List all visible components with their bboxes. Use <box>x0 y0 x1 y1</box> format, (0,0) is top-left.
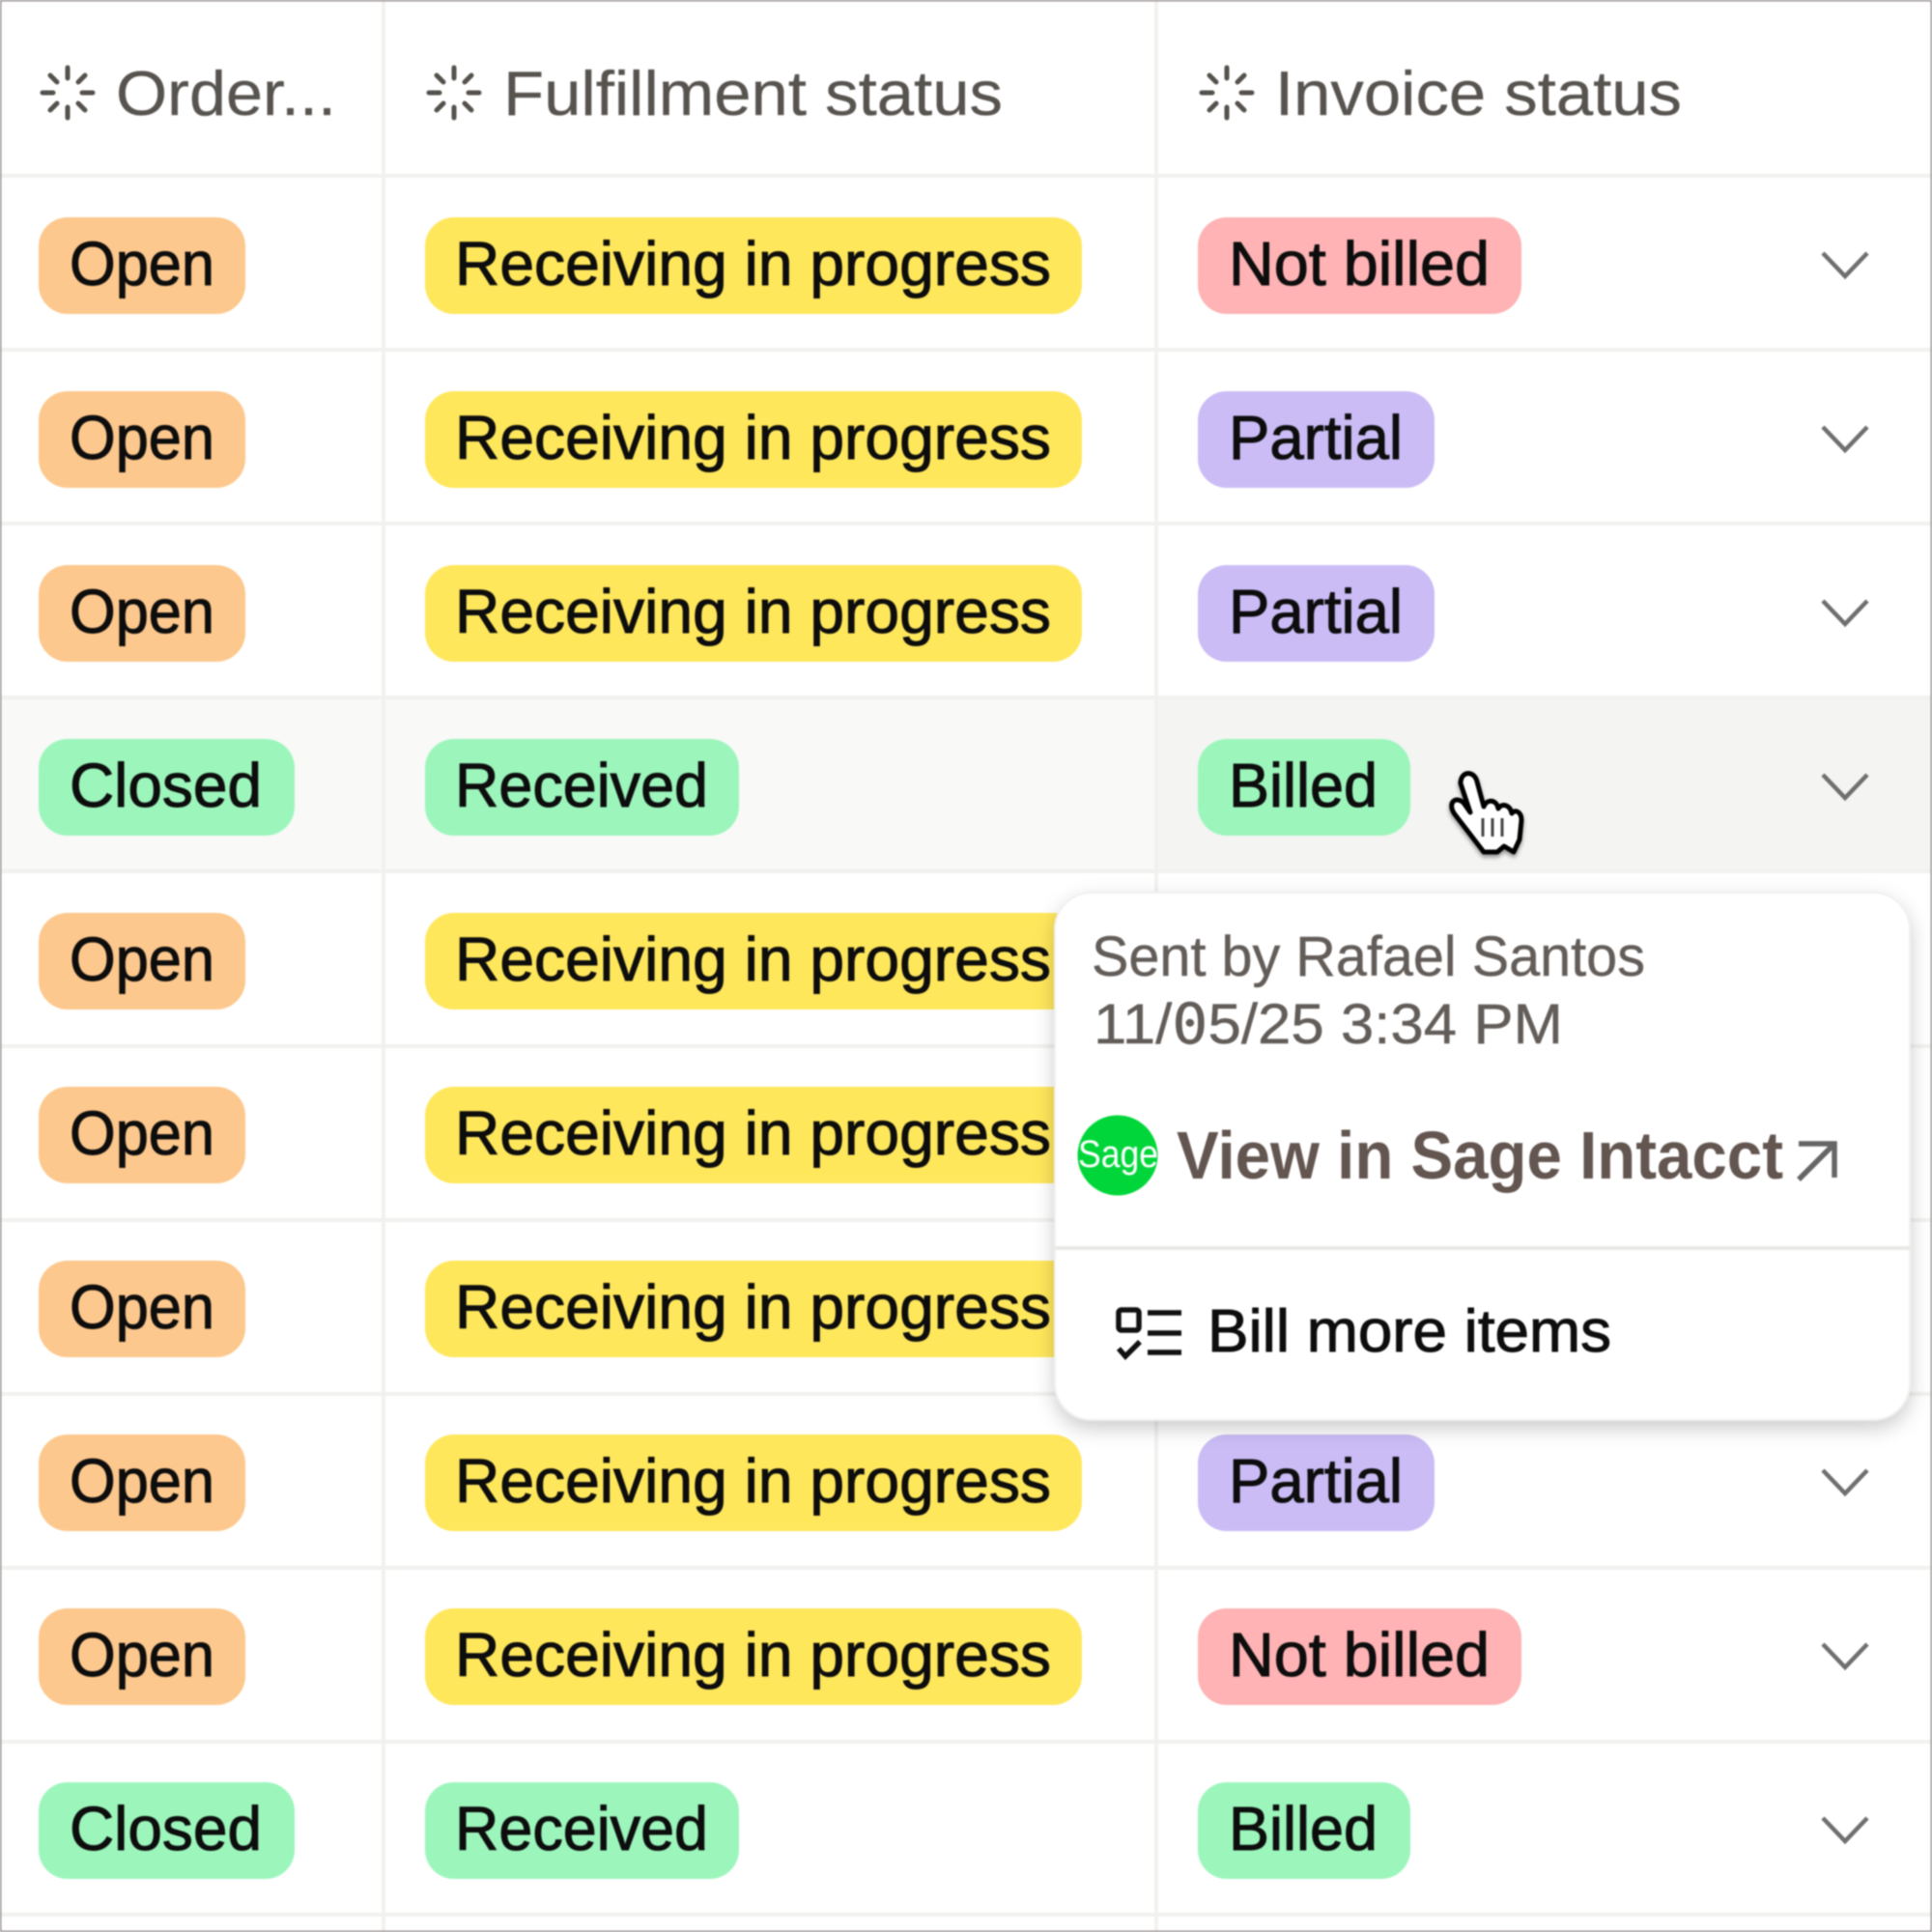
row 9: Not billed <box>1229 1620 1490 1690</box>
row 3 <box>39 565 1867 662</box>
column header: Invoice status: Invoice status <box>1275 58 1682 128</box>
row 2: Open <box>70 403 214 472</box>
sent date and time: 11/05/25 3:34 PM <box>1094 991 1563 1057</box>
icon: status spark <box>1202 68 1252 118</box>
row 5: Open <box>70 924 214 994</box>
row 8: Open <box>70 1446 214 1516</box>
row 2: Partial <box>1229 403 1403 472</box>
row 3: Receiving in progress <box>455 577 1051 646</box>
sent by line: Sent by Rafael Santos <box>1092 925 1645 988</box>
action: Bill more items: Bill more items <box>1208 1298 1611 1365</box>
row 4: highlighted: Closed <box>70 751 262 820</box>
icon: status spark <box>429 68 479 118</box>
link: View in Sage Intacct: View in Sage Intacct <box>1177 1118 1783 1193</box>
row 7: Receiving in progress <box>455 1272 1051 1342</box>
row 3: Partial <box>1229 577 1403 646</box>
row 10: Closed <box>70 1794 262 1863</box>
row 3: Open <box>70 577 214 646</box>
row 10 <box>39 1782 1867 1879</box>
icon: external link arrow <box>1799 1144 1834 1179</box>
row 6 <box>39 1087 1082 1183</box>
row 2 <box>39 391 1867 488</box>
row 1: Receiving in progress <box>455 229 1051 298</box>
row 1: Open <box>70 229 214 298</box>
row 4: highlighted: Billed <box>1229 751 1378 820</box>
icon: status spark <box>43 68 93 118</box>
row 10: Received <box>455 1794 708 1863</box>
row 2: Receiving in progress <box>455 403 1051 472</box>
icon: hand cursor <box>1452 774 1521 852</box>
row 8: Partial <box>1229 1446 1403 1516</box>
row 10: Billed <box>1229 1794 1378 1863</box>
column header: Order: Order... <box>116 58 336 128</box>
row 1 <box>39 217 1867 314</box>
row 9: Open <box>70 1620 214 1690</box>
row 6: Receiving in progress <box>455 1098 1051 1168</box>
row 7 <box>39 1261 1082 1357</box>
icon: Sage logo: Sage <box>1078 1133 1158 1176</box>
row 4: highlighted: Received <box>455 751 708 820</box>
popover: invoice details <box>1055 893 1910 1420</box>
divider <box>1055 1246 1910 1250</box>
column header: Fulfillment status: Fulfillment status <box>503 58 1003 128</box>
row 5: Receiving in progress <box>455 924 1051 994</box>
row 4: highlighted <box>39 739 1867 836</box>
row 8: Receiving in progress <box>455 1446 1051 1516</box>
row 9 <box>39 1608 1867 1705</box>
icon: checklist <box>1119 1310 1181 1356</box>
row 8 <box>39 1435 1867 1531</box>
row 1: Not billed <box>1229 229 1490 298</box>
popover card <box>1055 893 1910 1420</box>
icon: Sage logo <box>1078 1115 1158 1196</box>
highlighted row background <box>0 697 1932 871</box>
row 7: Open <box>70 1272 214 1342</box>
table header <box>43 58 1682 128</box>
row 6: Open <box>70 1098 214 1168</box>
row 9: Receiving in progress <box>455 1620 1051 1690</box>
row 5 <box>39 913 1082 1009</box>
